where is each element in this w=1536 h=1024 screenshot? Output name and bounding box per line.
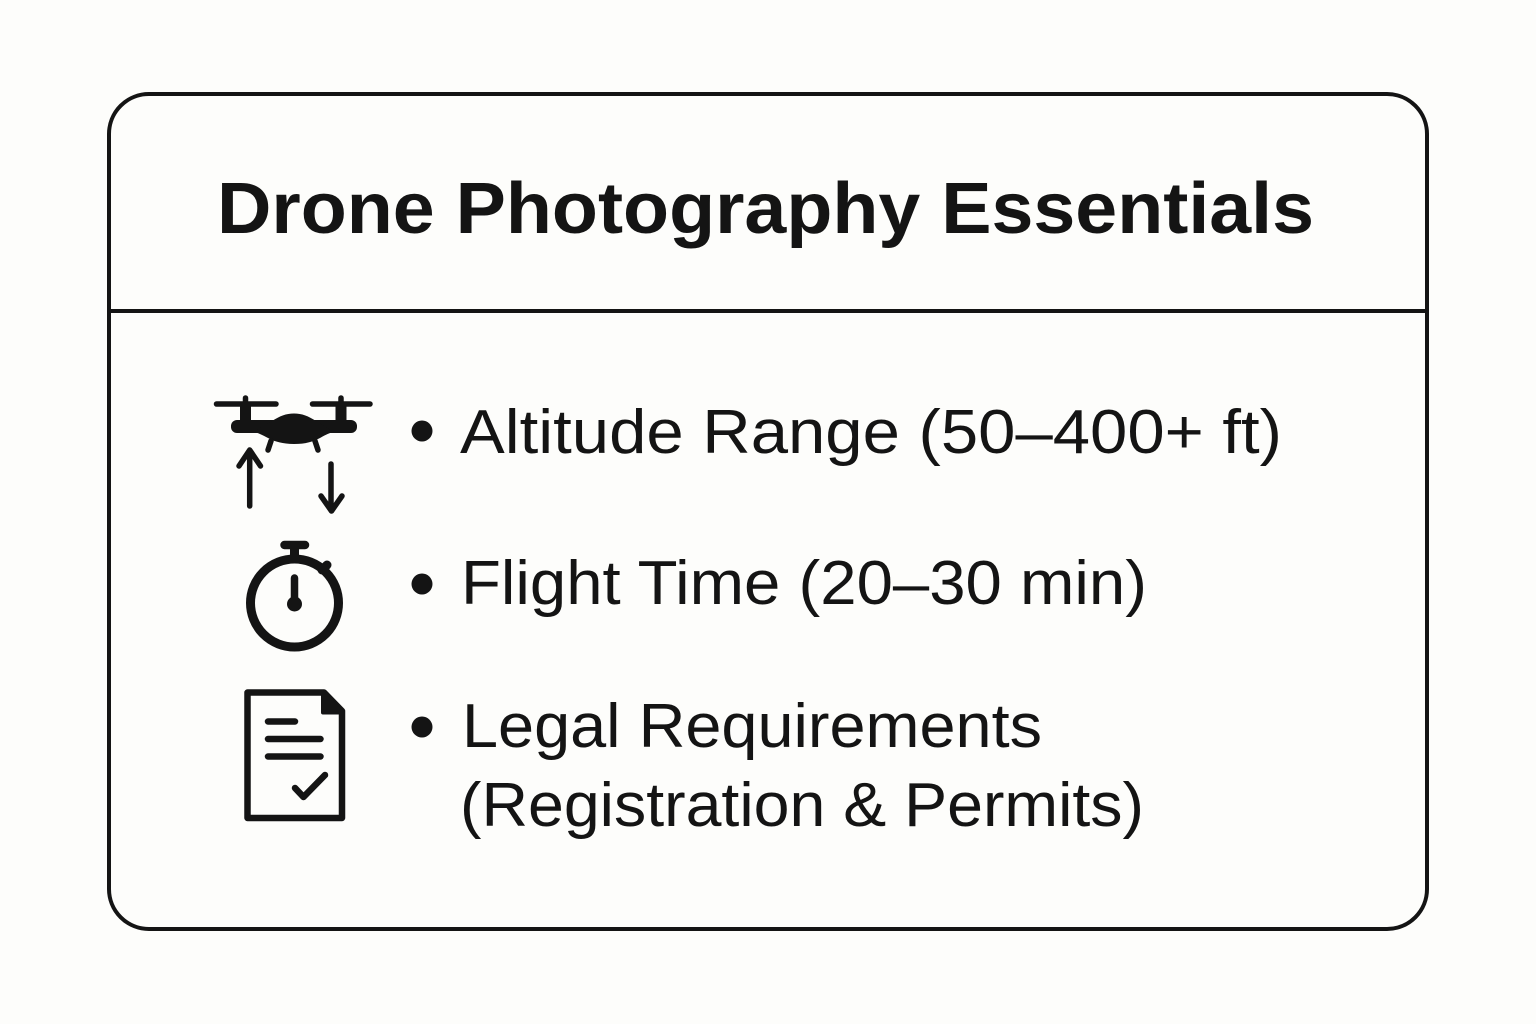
text: legal requirements: Legal Requirements [462, 692, 1042, 761]
text: flight time: Flight Time (20–30 min) [461, 549, 1147, 618]
title: Drone Photography Essentials [217, 169, 1314, 249]
icon: drone with up and down arrows [216, 398, 370, 511]
bullet: flight time [412, 574, 432, 594]
icon: document with checkmark [248, 692, 343, 818]
text: legal requirements: (Registration & Permits) [460, 771, 1144, 840]
text: altitude range: Altitude Range (50–400+ ft) [460, 398, 1282, 467]
bullet: legal requirements [412, 716, 432, 738]
panel: essentials card [109, 94, 1427, 929]
icon: stopwatch [250, 545, 338, 647]
bullet: altitude [412, 420, 432, 442]
text: legal requirements [460, 692, 1144, 840]
